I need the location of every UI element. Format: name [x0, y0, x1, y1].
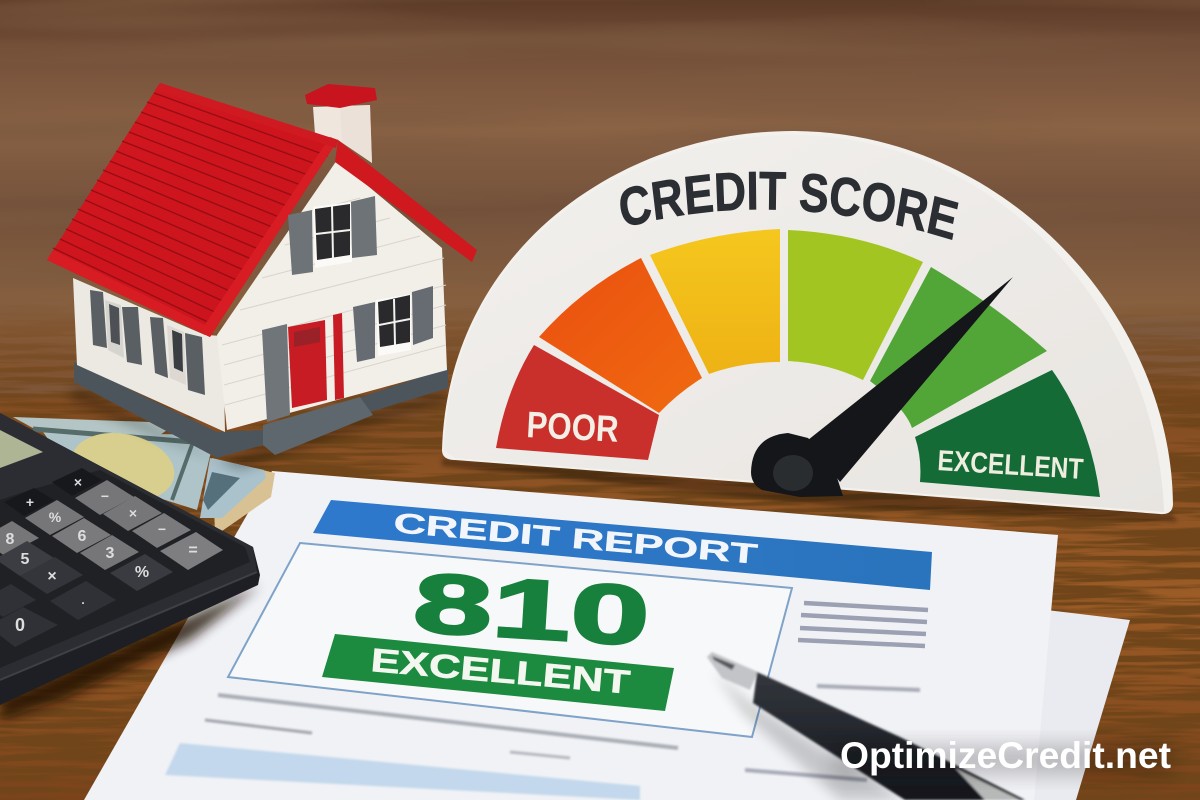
calculator keys: =	[188, 542, 198, 559]
red door	[262, 313, 373, 455]
calculator body	[0, 413, 260, 705]
calculator keys: 5	[21, 551, 30, 568]
roof	[47, 83, 477, 337]
calculator keys: ×	[74, 474, 82, 490]
calculator keys: %	[135, 564, 149, 581]
calculator	[0, 413, 260, 720]
report header band	[313, 500, 932, 590]
segment: excellent	[915, 370, 1100, 497]
house base	[74, 362, 448, 458]
calculator keys: ×	[129, 505, 137, 521]
segment: green	[870, 267, 1047, 428]
calculator keys: 8	[6, 531, 15, 548]
calculator keys: %	[49, 509, 62, 525]
left wall	[73, 278, 225, 432]
brand logo: OptimizeCredit.net	[840, 735, 1171, 776]
calculator display	[0, 430, 43, 468]
segment: lime	[788, 230, 923, 380]
calculator keys: ×	[47, 568, 57, 585]
segment: poor	[496, 345, 659, 460]
gauge title: CREDIT SCORE	[620, 172, 958, 240]
house model	[47, 83, 477, 470]
report fine print	[165, 686, 920, 800]
front bill	[43, 432, 215, 510]
right wall	[217, 160, 447, 430]
door step	[263, 397, 373, 455]
score box	[228, 543, 792, 737]
left wall windows	[90, 290, 205, 395]
upper window	[288, 196, 377, 275]
segment: excellent: EXCELLENT	[937, 445, 1084, 486]
segment: yellow	[650, 229, 780, 374]
chimney	[305, 84, 377, 163]
calculator keys: +	[26, 494, 34, 510]
pen	[707, 652, 1025, 800]
segment: poor: POOR	[526, 404, 620, 450]
report summary lines	[798, 603, 928, 646]
calculator keys	[0, 468, 223, 647]
calculator keys: 6	[78, 528, 87, 545]
segment: orange	[539, 258, 702, 413]
stack of money	[13, 417, 275, 532]
excellent badge: EXCELLENT	[369, 641, 632, 701]
second paper sheet	[900, 608, 1130, 800]
calculator shadow	[0, 585, 260, 720]
credit report document	[84, 471, 1058, 800]
back bills	[212, 458, 275, 532]
calculator keys: −	[101, 488, 109, 504]
calculator keys: −	[158, 521, 166, 537]
house shadow	[70, 385, 450, 470]
calculator keys: 3	[106, 545, 115, 562]
score number 810: 810	[411, 555, 652, 663]
gauge body	[442, 131, 1173, 514]
credit score gauge	[442, 131, 1173, 514]
lower right window	[353, 286, 433, 362]
calculator keys: .	[81, 593, 85, 607]
report header band: CREDIT REPORT	[392, 507, 759, 570]
calculator keys: 0	[15, 615, 25, 635]
excellent badge	[322, 634, 674, 711]
gauge shadow	[442, 458, 1178, 522]
needle	[751, 277, 1013, 497]
